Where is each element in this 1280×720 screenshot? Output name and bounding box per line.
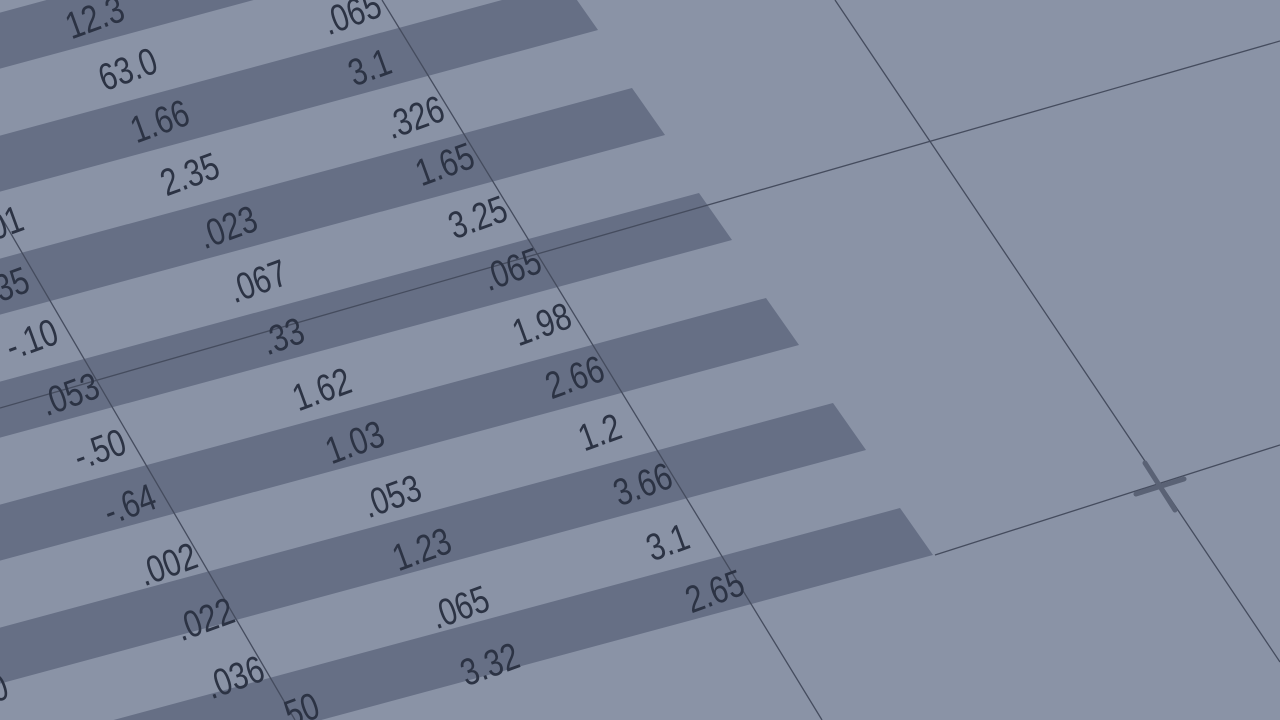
table numbers: 63.0 (93, 40, 163, 100)
table numbers: .053 (35, 365, 105, 425)
table numbers: 1.2 (573, 406, 627, 460)
table numbers: .065 (477, 240, 547, 300)
table numbers: 1.62 (287, 360, 357, 420)
table numbers: .036 (200, 648, 270, 708)
table numbers: .023 (193, 198, 263, 258)
table numbers: 1.66 (125, 92, 195, 152)
table numbers: 3.1 (343, 41, 397, 95)
table numbers (0, 0, 750, 720)
table numbers: 1.98 (507, 295, 577, 355)
table numbers: 1.03 (320, 413, 390, 473)
table numbers: .067 (223, 252, 293, 312)
crosshair marker (1136, 463, 1184, 510)
table numbers: 3.1 (641, 516, 695, 570)
table numbers: 2.35 (155, 145, 225, 205)
table numbers: .065 (425, 578, 495, 638)
table numbers: .002 (133, 535, 203, 595)
table numbers: 1.23 (387, 520, 457, 580)
table numbers: -.64 (98, 476, 162, 534)
table numbers: 3.25 (443, 188, 513, 248)
table numbers: 2.65 (680, 562, 750, 622)
table numbers: .022 (170, 590, 240, 650)
table numbers: .33 (256, 310, 310, 364)
table numbers: -.10 (0, 311, 64, 369)
table numbers: 1.65 (410, 135, 480, 195)
table numbers: .326 (380, 88, 450, 148)
table numbers: .053 (357, 467, 427, 527)
table numbers: 3.66 (608, 455, 678, 515)
table numbers: 2.66 (540, 348, 610, 408)
shaded table rows (0, 0, 933, 720)
table numbers: -.50 (68, 421, 132, 479)
table numbers: 3.32 (455, 635, 525, 695)
